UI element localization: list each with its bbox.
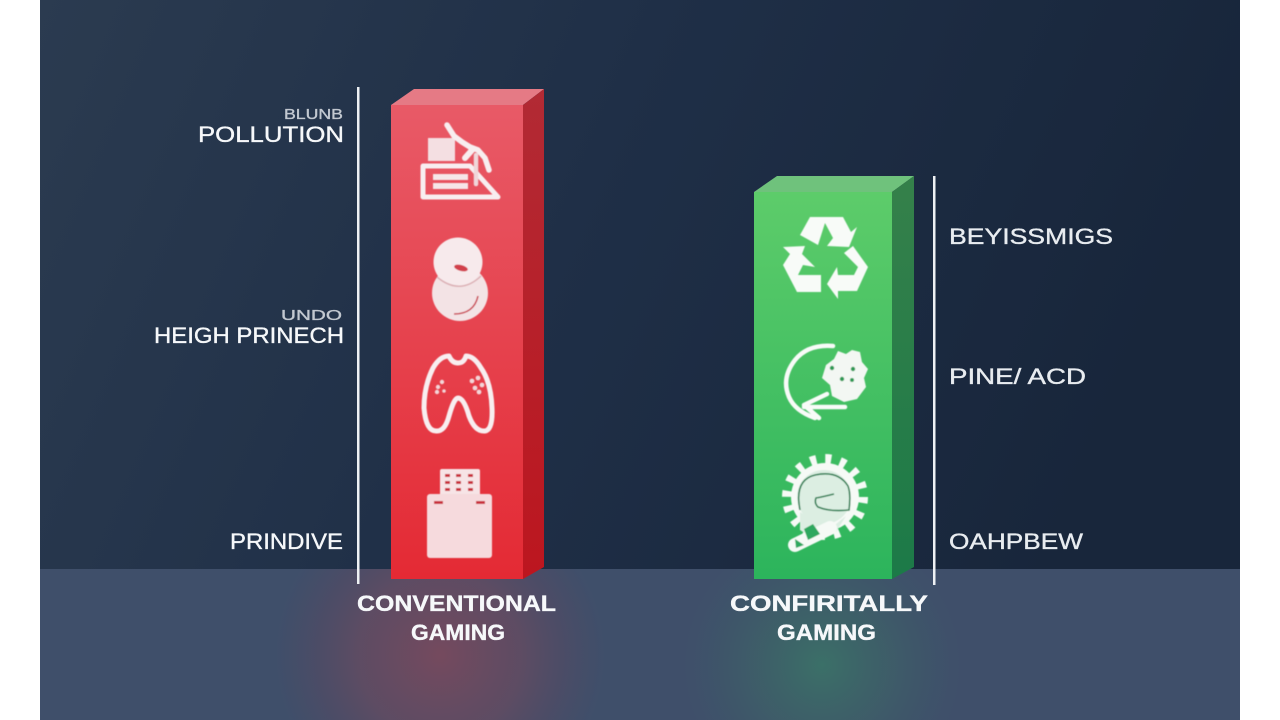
right axis line (933, 176, 936, 585)
label: undo: UNDO (281, 307, 342, 324)
icon: game controller (424, 356, 492, 431)
label: oahpbew: OAHPBEW (949, 529, 1083, 554)
icon: recycling arrows (783, 217, 868, 299)
left axis line (357, 87, 360, 584)
label: beyissmigs: BEYISSMIGS (949, 224, 1113, 249)
label: pine acd: PINE/ ACD (949, 364, 1086, 389)
icon: power supply chip (427, 469, 492, 558)
bar caption: confiritally gaming (730, 591, 928, 645)
label: pollution: POLLUTION (198, 122, 344, 147)
bar caption: conventional gaming (357, 591, 556, 645)
icon: circular arrow with leaf cluster (786, 346, 868, 418)
label: blunb: BLUNB (284, 106, 343, 123)
panel: conventional gaming bar (391, 89, 544, 579)
bar caption: conventional gaming: GAMING (411, 620, 505, 645)
icon: gear light bulb (787, 459, 863, 548)
floor (40, 569, 1240, 720)
bar caption: confiritally gaming: CONFIRITALLY (730, 591, 928, 616)
bar caption: conventional gaming: CONVENTIONAL (357, 591, 556, 616)
bar caption: confiritally gaming: GAMING (777, 620, 876, 645)
panel: second gaming bar (754, 176, 914, 579)
label: heigh prinech: HEIGH PRINECH (154, 323, 344, 348)
icon: stacked discs (432, 238, 488, 321)
icon: factory (423, 125, 498, 197)
label: prindive: PRINDIVE (230, 529, 343, 554)
background panel (40, 0, 1240, 570)
